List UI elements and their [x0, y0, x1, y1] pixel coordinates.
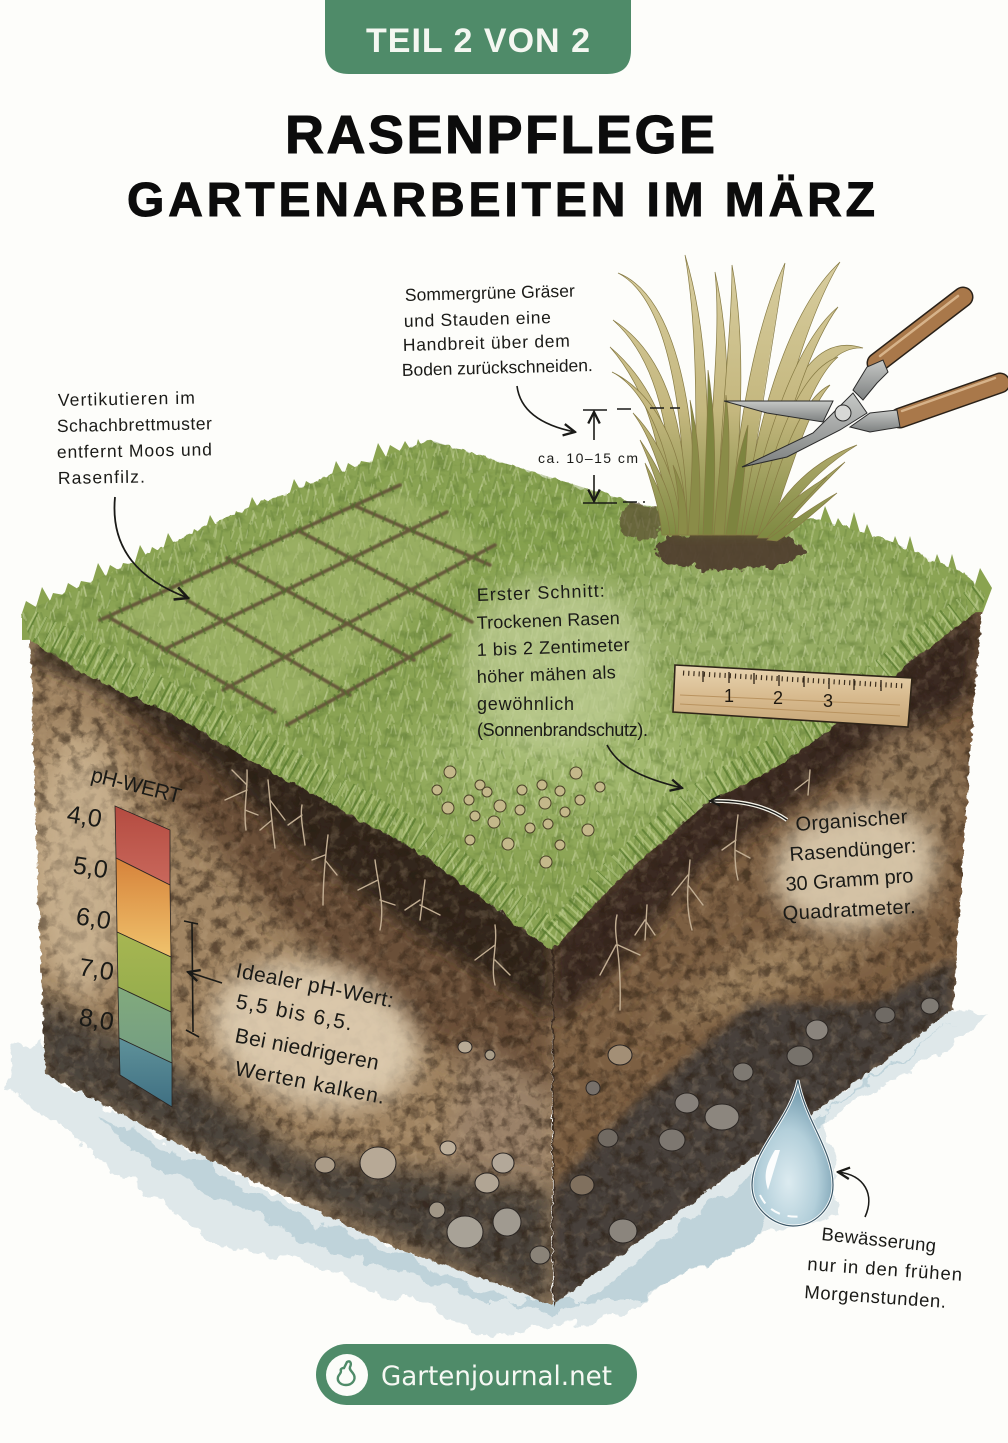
arrow: fertiliser: [710, 801, 787, 820]
title: [127, 105, 875, 227]
dark earth around grass clump: [618, 504, 802, 570]
pH scale labels: pH-WERT: [89, 764, 184, 808]
measuring ruler on lawn: [673, 665, 912, 727]
soil block: left face: [20, 620, 560, 1320]
note: ideal pH value: Bei niedrigeren: [233, 1024, 381, 1075]
note: first cut: 1 bis 2 Zentimeter: [476, 635, 630, 660]
note: watering: nur in den frühen: [807, 1253, 963, 1285]
note: ideal pH value: Idealer pH-Wert:: [234, 959, 395, 1012]
footer pill: Gartenjournal.net: [316, 1344, 637, 1405]
pH scale colour bar: [115, 806, 172, 1107]
footer pill: Gartenjournal.net: Gartenjournal.net: [381, 1361, 612, 1392]
note: first cut: (Sonnenbrandschutz).: [477, 720, 648, 740]
measuring ruler on lawn: 1: [724, 686, 734, 706]
note: cutting back grasses: Boden zurückschneiden.: [402, 355, 593, 380]
note: organic fertiliser: Organischer: [795, 806, 908, 836]
checkerboard scarified grid on lawn: [100, 485, 495, 725]
note: watering: Bewässerung: [821, 1223, 937, 1256]
arrow: to cutting height: [517, 386, 575, 432]
grass fringe along back edges: [22, 439, 992, 640]
note: first cut: [476, 581, 648, 740]
stones in the soil layers: [315, 998, 939, 1264]
arrow: to grid: [114, 497, 188, 598]
lawn surface: [0, 420, 1008, 960]
arrow: to lawn: [607, 745, 682, 788]
note: organic fertiliser: 30 Gramm pro: [785, 865, 914, 896]
shears: metal blades: [724, 360, 900, 467]
shears: handles: [877, 296, 1000, 418]
height dimension marker: [538, 408, 680, 503]
note: first cut: gewöhnlich: [477, 694, 574, 714]
fertilizer pellets: [432, 766, 605, 868]
note: organic fertiliser: Quadratmeter.: [782, 896, 916, 925]
plant roots: [225, 770, 810, 1010]
banner: part 2 of 2: [325, 0, 631, 74]
note: first cut: höher mähen als: [476, 662, 616, 687]
note: scarifying: Schachbrettmuster: [57, 413, 212, 436]
pH scale labels: 4,0: [65, 800, 104, 833]
note: organic fertiliser: Rasendünger:: [789, 835, 917, 866]
measuring ruler on lawn: 2: [773, 688, 783, 708]
note: scarifying: Vertikutieren im: [58, 388, 195, 410]
note: cutting back grasses: Handbreit über dem: [403, 331, 570, 355]
pH scale labels: 7,0: [77, 953, 116, 986]
height dimension marker: ca. 10–15 cm: [538, 450, 638, 466]
note: scarifying: Rasenfilz.: [58, 466, 145, 488]
title: GARTENARBEITEN IM MÄRZ: [127, 174, 875, 227]
banner: part 2 of 2: TEIL 2 VON 2: [366, 22, 590, 60]
note: first cut: Erster Schnitt:: [476, 581, 605, 605]
note: watering: [804, 1223, 963, 1312]
note: organic fertiliser: [782, 806, 917, 925]
ideal pH bracket and arrow: [184, 921, 222, 1037]
soil block: right face: [550, 600, 990, 1310]
note: ideal pH value: [233, 959, 395, 1109]
note: scarifying: entfernt Moos und: [57, 439, 212, 462]
note: cutting back grasses: Sommergrüne Gräser: [405, 281, 575, 305]
pH scale labels: 8,0: [77, 1003, 116, 1036]
ornamental grass clump: [610, 255, 863, 541]
note: ideal pH value: 5,5 bis 6,5.: [234, 990, 354, 1035]
note: cutting back grasses: [402, 281, 593, 380]
pruning shears: [724, 296, 1000, 467]
pH scale labels: [65, 764, 184, 1036]
note: first cut: Trockenen Rasen: [476, 608, 620, 633]
icon: water drop: [752, 1080, 833, 1226]
water stain under the soil block: [7, 1005, 987, 1333]
title: RASENPFLEGE: [285, 105, 715, 165]
pH scale labels: 5,0: [71, 851, 110, 884]
note: watering: Morgenstunden.: [804, 1281, 947, 1312]
pH scale labels: 6,0: [74, 902, 113, 935]
arrow: to water drop: [838, 1172, 869, 1217]
measuring ruler on lawn: 3: [823, 691, 833, 711]
note: scarifying: [57, 388, 212, 488]
note: cutting back grasses: und Stauden eine: [404, 307, 551, 331]
note: ideal pH value: Werten kalken.: [233, 1057, 387, 1109]
